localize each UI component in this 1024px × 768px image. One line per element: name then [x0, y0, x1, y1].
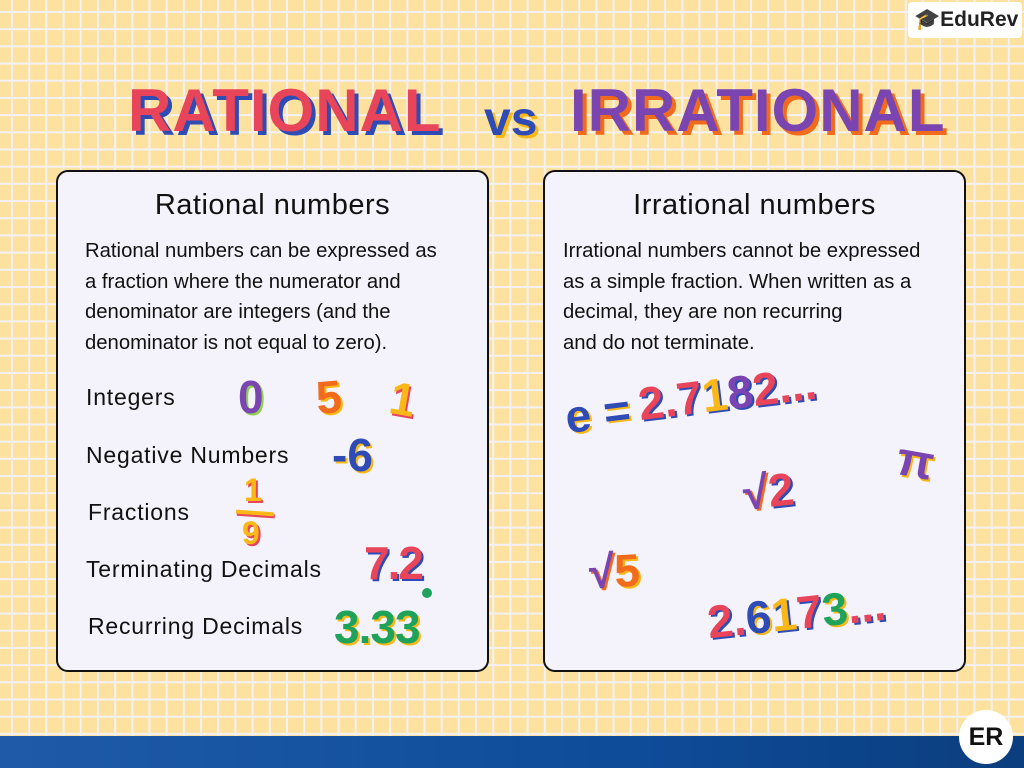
- logo: EduRev: 🎓EduRev: [914, 8, 1018, 31]
- symbol: sqrt 2: √2: [740, 462, 796, 520]
- number: 3.33: [334, 588, 432, 653]
- symbol: pi: π: [893, 432, 938, 491]
- numbers: integers: 0: [238, 371, 264, 423]
- logo: ER badge: ER: [969, 723, 1003, 751]
- text: irrational definition: as a simple fraction. When written as a: [563, 270, 911, 292]
- numbers: integers: 5: [314, 370, 344, 424]
- label: fractions: Fractions: [88, 499, 190, 525]
- panel: irrational numbers: [543, 170, 966, 672]
- number: -6: -6: [332, 429, 373, 481]
- number: 3.33: 3.33: [334, 601, 420, 653]
- text: rational definition: denominator are integers (and the: [85, 301, 391, 323]
- number: 1/9: 9: [242, 515, 260, 551]
- label: integers: Integers: [86, 384, 176, 410]
- number: 2.6173...: 2.6173...: [705, 578, 888, 648]
- text: irrational definition: [563, 240, 920, 354]
- title: vs: [484, 93, 537, 146]
- title: [128, 77, 947, 146]
- heading: irrational: Irrational numbers: [633, 189, 876, 221]
- title: RATIONAL: [128, 77, 442, 144]
- number: 7.2: 7.2: [364, 537, 422, 589]
- text: rational definition: Rational numbers can be expressed as: [85, 240, 437, 262]
- number: e = 2.7182...: [562, 357, 819, 443]
- text: irrational definition: decimal, they are non recurring: [563, 301, 843, 323]
- symbol: sqrt 5: √5: [588, 544, 641, 598]
- numbers: integers: [238, 370, 420, 427]
- title: IRRATIONAL: [570, 77, 946, 144]
- number: 1/9: 1: [244, 472, 262, 508]
- heading: rational: Rational numbers: [155, 189, 390, 221]
- numbers: integers: 1: [386, 371, 420, 427]
- label: terminating decimals: Terminating Decimals: [86, 556, 322, 582]
- logo: ER badge: [959, 710, 1013, 764]
- footer bar: [0, 736, 1024, 768]
- text: rational definition: [85, 240, 437, 354]
- number: e = 2.7182...: 2.7182...: [635, 357, 819, 430]
- number: e = 2.7182...: e =: [562, 383, 633, 443]
- text: irrational definition: Irrational numbers cannot be expressed: [563, 240, 920, 262]
- panel: rational numbers: [56, 170, 489, 672]
- label: negative numbers: Negative Numbers: [86, 442, 289, 468]
- number: 1/9: [236, 472, 275, 551]
- text: irrational definition: and do not terminate.: [563, 332, 755, 354]
- label: recurring decimals: Recurring Decimals: [88, 613, 303, 639]
- text: rational definition: denominator is not equal to zero).: [85, 332, 387, 354]
- logo: EduRev: [908, 2, 1022, 38]
- text: rational definition: a fraction where the numerator and: [85, 270, 401, 292]
